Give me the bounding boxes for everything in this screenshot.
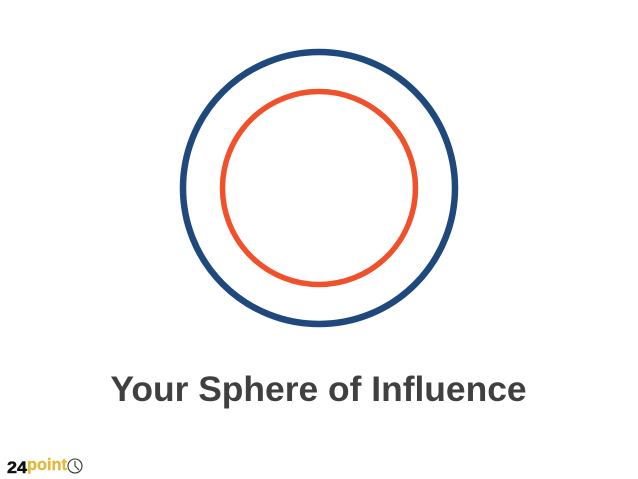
- logo: 24point: [7, 455, 82, 477]
- logo text: point: point: [27, 455, 67, 474]
- title: Your Sphere of Influence: [110, 369, 527, 409]
- icon: clock: [68, 459, 82, 473]
- outer circle: [183, 52, 455, 324]
- inner circle: [222, 92, 416, 284]
- logo text: 24: 24: [7, 458, 28, 477]
